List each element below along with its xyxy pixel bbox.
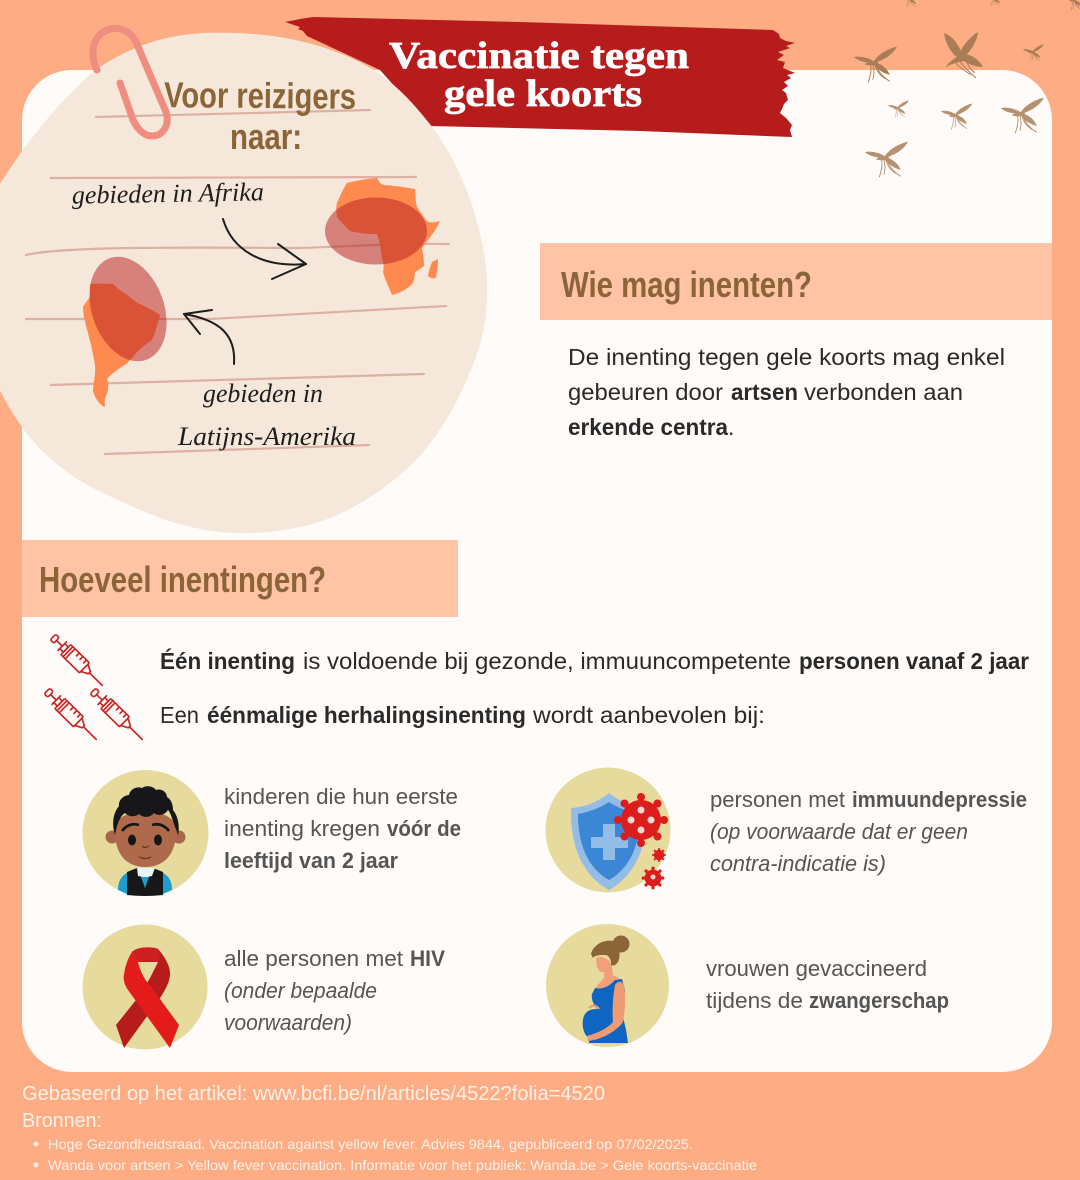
icon: mosquitoes	[854, 0, 1080, 177]
heading: Hoeveel inentingen?	[39, 559, 326, 600]
text: herhalingsinenting: éénmalige herhalingsinenting	[207, 702, 526, 728]
footer: sources: Bronnen:	[22, 1110, 102, 1132]
text: immuundepressie: immuundepressie	[852, 787, 1027, 812]
text block: .	[728, 414, 734, 440]
footer: sources	[22, 1083, 757, 1173]
text: immuundepressie: contra-indicatie is)	[710, 851, 886, 876]
title: Vaccinatie tegen	[389, 35, 689, 77]
label: gebieden in Latijns-Amerika: gebieden in	[203, 379, 323, 408]
text: kinderen	[224, 784, 461, 873]
text: kinderen: inenting kregen	[224, 816, 380, 841]
text: een inenting: is voldoende bij gezonde, immuuncompetente	[303, 648, 791, 674]
label: gebieden in Latijns-Amerika: Latijns-Amerika	[177, 422, 356, 451]
text: herhalingsinenting: Een	[160, 702, 199, 728]
text block: gebeuren door	[568, 379, 723, 405]
text: een inenting: personen vanaf 2 jaar	[799, 648, 1029, 674]
panel: hoeveel inentingen	[22, 540, 458, 617]
panel: wie mag inenten	[540, 243, 1052, 440]
icon: paperclip	[93, 28, 167, 136]
icon: red ribbon	[82, 924, 208, 1050]
icon: pregnant woman	[546, 924, 669, 1047]
map: Africa	[325, 178, 440, 295]
title: gele koorts	[444, 73, 642, 115]
text: zwangerschap: zwangerschap	[809, 988, 949, 1013]
text: een inenting	[160, 647, 1029, 674]
text: zwangerschap: tijdens de	[706, 988, 803, 1013]
text: HIV	[224, 946, 445, 1035]
text: immuundepressie: personen met	[710, 787, 845, 812]
text: HIV: alle personen met	[224, 946, 403, 971]
text: kinderen: leeftijd van 2 jaar	[224, 848, 398, 873]
footer: sources: Gebaseerd op het artikel: www.bcfi.be/nl/articles/4522?folia=4520	[22, 1083, 605, 1105]
text: herhalingsinenting: wordt aanbevolen bij:	[532, 702, 765, 728]
text: zwangerschap	[706, 956, 949, 1013]
heading: voor reizigers naar	[164, 74, 356, 157]
icon: one syringe	[48, 632, 107, 690]
text: immuundepressie	[710, 787, 1027, 876]
banner: red brush stroke	[285, 17, 795, 137]
text: herhalingsinenting	[160, 702, 765, 728]
heading band	[22, 540, 458, 617]
text block: erkende centra	[568, 414, 728, 440]
icon: two syringes	[42, 686, 147, 744]
text block	[568, 344, 1005, 440]
title	[389, 35, 689, 115]
icon: shield and virus	[546, 768, 670, 892]
footer: sources: Hoge Gezondheidsraad. Vaccination against yellow fever. Advies 9844, gepubliceerd op 07/02/2025.	[48, 1136, 693, 1152]
label: gebieden in Afrika: gebieden in Afrika	[72, 177, 264, 210]
heading: voor reizigers naar: naar:	[230, 116, 302, 157]
arrow: to Africa	[223, 219, 306, 279]
arrow: to South America	[184, 310, 234, 364]
text block: De inenting tegen gele koorts mag enkel	[568, 344, 1005, 370]
map: South America	[76, 246, 180, 407]
text: zwangerschap: vrouwen gevaccineerd	[706, 956, 927, 981]
icon: child	[82, 770, 208, 896]
text block: verbonden aan	[804, 379, 963, 405]
text: immuundepressie: (op voorwaarde dat er geen	[710, 819, 968, 844]
text: kinderen: kinderen die hun eerste	[224, 784, 458, 809]
text: HIV: voorwaarden)	[224, 1010, 352, 1035]
label: gebieden in Latijns-Amerika	[177, 379, 356, 451]
text: kinderen: vóór de	[387, 816, 461, 841]
footer: sources: Wanda voor artsen > Yellow fever vaccination. Informatie voor het publiek: Wanda.be > Gele koorts-vaccinatie	[48, 1157, 757, 1173]
text block: artsen	[731, 379, 798, 405]
panel: travellers blob	[0, 33, 487, 533]
heading: voor reizigers naar: Voor reizigers	[164, 74, 356, 117]
text: een inenting: Één inenting	[160, 647, 295, 674]
text: HIV: (onder bepaalde	[224, 978, 377, 1003]
text: HIV: HIV	[410, 946, 445, 971]
heading: Wie mag inenten?	[561, 264, 812, 305]
heading band	[540, 243, 1052, 320]
